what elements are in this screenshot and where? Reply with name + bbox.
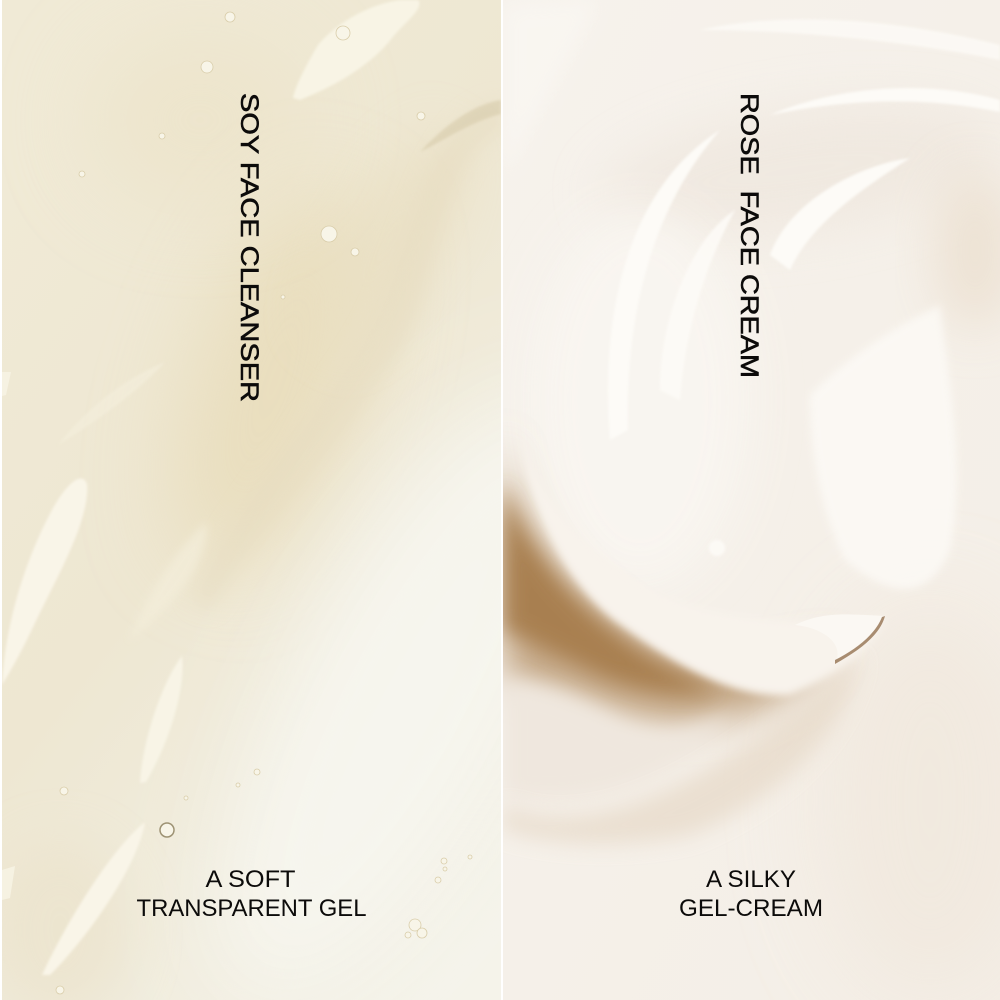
heading: rose face cream: ROSE FACE CREAM bbox=[735, 93, 763, 378]
glossy highlights bbox=[2, 0, 501, 975]
soft swirl shading bbox=[664, 127, 1000, 870]
caption: a silky gel-cream: A SILKY bbox=[706, 866, 796, 893]
caption: a silky gel-cream bbox=[679, 866, 823, 922]
bubbles bbox=[56, 12, 472, 994]
warm golden shading bbox=[26, 119, 501, 993]
caption: a soft transparent gel bbox=[136, 866, 366, 922]
glossy highlights bbox=[634, 20, 1000, 588]
panel: soy face cleanser texture bbox=[2, 0, 501, 1000]
caption: a soft transparent gel: A SOFT bbox=[206, 866, 296, 893]
panel: rose face cream texture bbox=[503, 0, 1000, 1000]
caption: a silky gel-cream: GEL-CREAM bbox=[679, 895, 823, 922]
cream fold bbox=[532, 480, 885, 700]
caption: a soft transparent gel: TRANSPARENT GEL bbox=[136, 895, 366, 922]
brown shadow under the swirl bbox=[503, 430, 860, 844]
heading: soy face cleanser: SOY FACE CLEANSER bbox=[235, 93, 263, 402]
